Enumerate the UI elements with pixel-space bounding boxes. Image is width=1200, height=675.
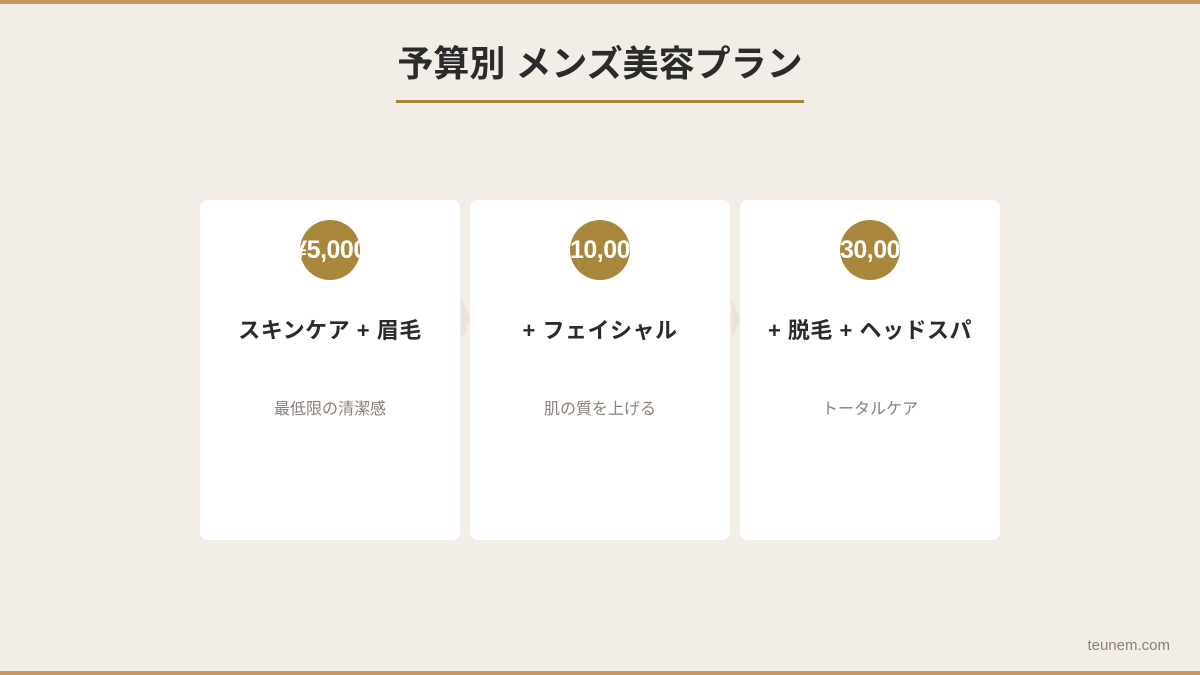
price circle	[840, 220, 900, 280]
plan heading: + フェイシャル	[523, 318, 677, 343]
title underline	[396, 100, 804, 103]
description: 最低限の清潔感	[274, 401, 386, 418]
plan heading: スキンケア + 眉毛	[238, 318, 422, 343]
card: 30000	[740, 200, 1000, 540]
arrow	[461, 298, 471, 340]
description: 肌の質を上げる	[544, 401, 656, 418]
price circle	[300, 220, 360, 280]
price circle	[570, 220, 630, 280]
card: 5000	[200, 200, 460, 540]
card: 10000	[470, 200, 730, 540]
footer credit: teunem.com	[1087, 637, 1170, 654]
plan heading: + 脱毛 + ヘッドスパ	[768, 318, 972, 343]
arrow	[731, 298, 741, 340]
title: 予算別 メンズ美容プラン	[397, 43, 803, 84]
description: トータルケア	[822, 401, 918, 418]
